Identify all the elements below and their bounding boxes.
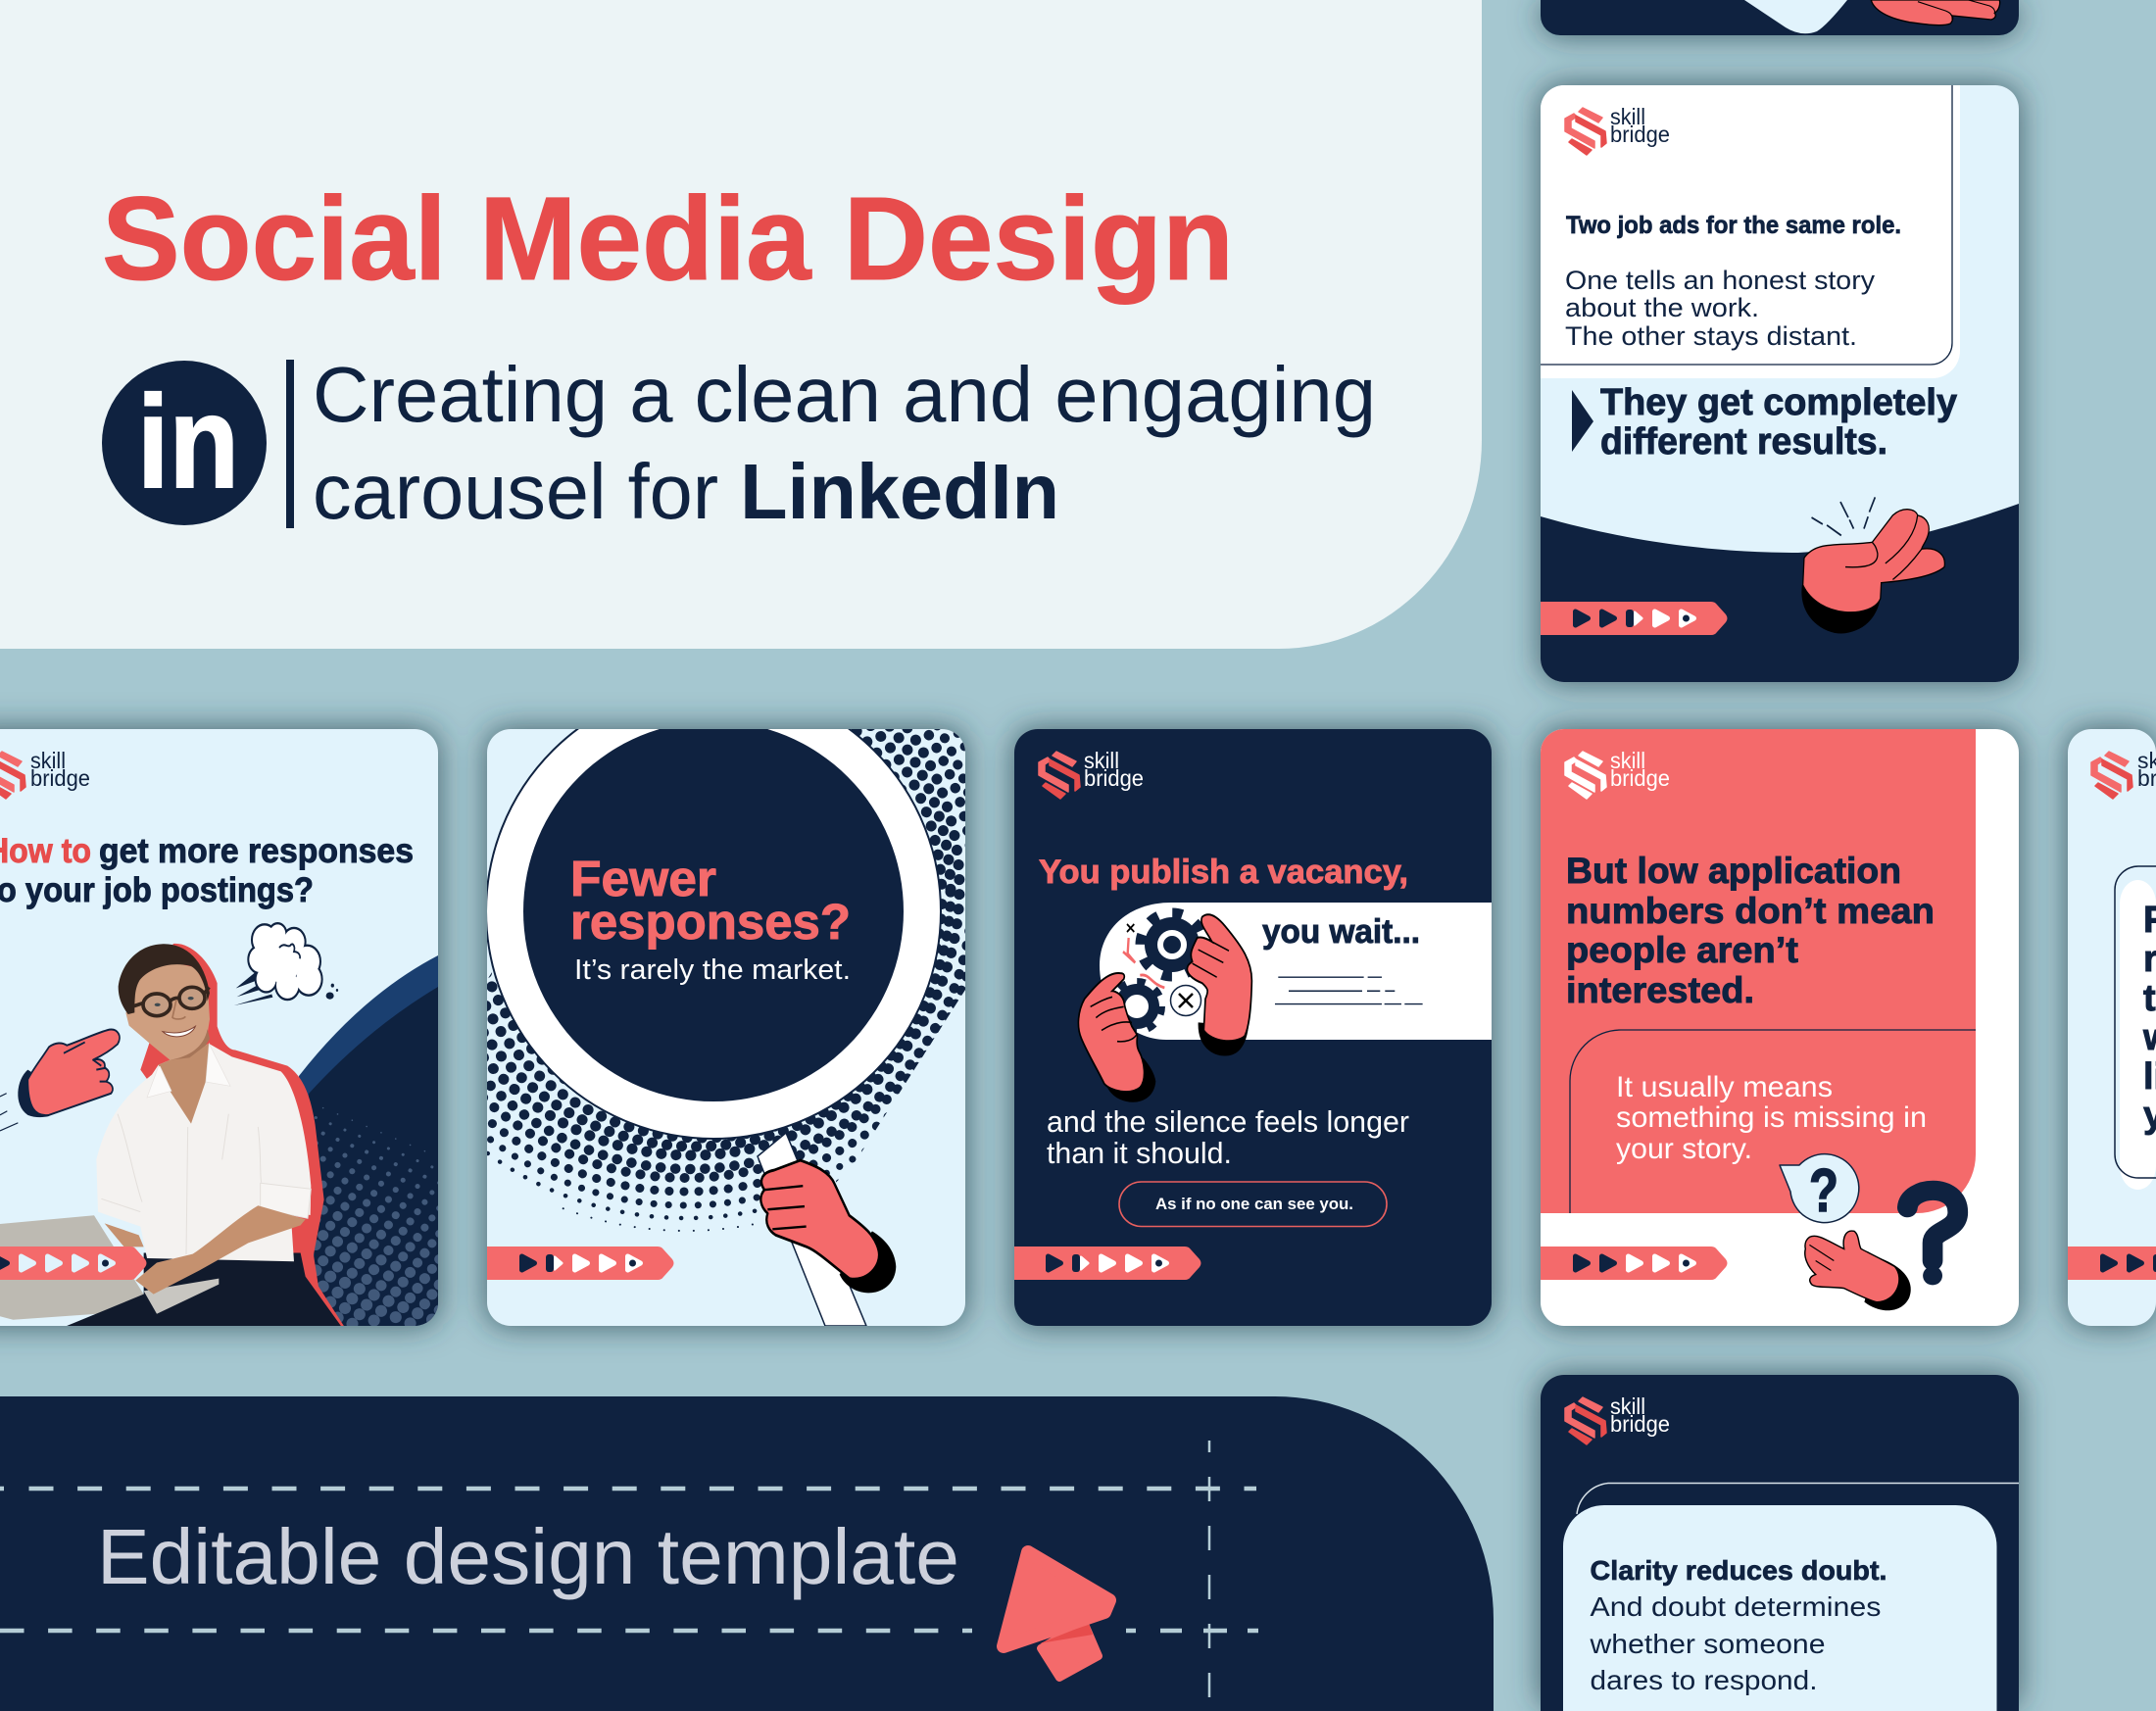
progress bar [2068,1247,2156,1280]
left arm skin [105,1223,144,1247]
icon: triangle marker [1572,390,1593,452]
logo: bridge [1610,1411,1670,1437]
logo: bridge [30,765,90,791]
heading: low application numbers: But low application [1566,851,1901,891]
icon: hand [1871,0,2000,25]
guide: top dashed line [0,1487,1256,1491]
magnifier handle [758,1133,866,1326]
card: top cropped slide [1541,0,2019,35]
icon: speech bubble with question mark [1780,1154,1859,1225]
icon: circled cross [1170,986,1201,1015]
icon: coral squiggles [1123,938,1164,988]
logo [0,748,90,799]
logo: skill [1084,748,1119,773]
card: fewer responses [337,533,1035,1326]
heading: different results: different results. [1600,421,1887,463]
icon: LinkedIn: in [137,369,239,515]
subheading: It’s rarely the market. [574,954,851,986]
progress bar [0,1247,147,1280]
text lines [1275,977,1423,1004]
coral panel [1541,729,1976,1213]
logo: skill [1610,1393,1645,1419]
icon: large gear [1142,914,1202,975]
guide: bottom dashed line [0,1629,972,1633]
logo [1565,748,1670,799]
subtitle [313,351,1376,535]
icon: hand on handle [760,1160,896,1293]
guide: vertical dashed line [1208,1441,1210,1711]
heading: editable design template: Editable design template [97,1513,959,1600]
logo: skill [1610,104,1645,129]
logo: bridge [1610,122,1670,147]
blue arc [299,955,438,1326]
progress bar [1541,602,1727,635]
logo: skill [30,748,66,773]
text: and the silence [1047,1104,1409,1170]
icon: large question mark [1907,1191,1958,1285]
heading: low application numbers [1566,851,1935,1010]
logo: bridge [1610,765,1670,791]
panel: title [0,0,1482,649]
illustration: gears and hands [1078,914,1251,1102]
icon: open hand [1805,1231,1911,1310]
photo: smiling man with laptop [0,944,346,1330]
progress bar [1482,1247,1727,1280]
heading: how to get more responses: get more responses [99,832,414,870]
text: clarity reduces doubt: dares to respond. [1590,1665,1817,1695]
heading: different results [1599,387,1958,455]
icon: small gear [1113,983,1160,1030]
logo: bridge [1084,765,1144,791]
forearm and hand [135,1205,306,1295]
frame line [1577,1484,2019,1514]
shirt [96,1044,311,1261]
laptop base [144,1279,219,1314]
glasses [134,987,209,1016]
icon: right hand [1187,914,1251,1056]
frame line [1570,1030,1976,1213]
icon: thought cloud [234,924,338,1005]
text: missing in your story: your story. [1616,1133,1752,1165]
text: clarity reduces doubt: whether someone [1589,1629,1825,1659]
divider [286,360,294,528]
card: how to get more responses [0,729,451,1330]
subtitle: Creating a clean and engaging [313,351,1376,438]
card: right cropped slide [2068,729,2156,1326]
text: you wait: you wait... [1262,913,1420,951]
logo [1565,1393,1670,1444]
white callout box [2115,866,2156,1190]
navy wave [1541,504,2019,682]
progress bar [428,1247,674,1280]
icon: cursor arrow [1004,1552,1109,1678]
subtitle: carousel for LinkedIn [313,448,1059,535]
guide: bottom dashed line right part [1126,1629,1258,1633]
red sticker outline [140,944,346,1330]
progress bar [956,1247,1201,1280]
hair [119,944,210,1014]
heading: low application numbers: interested. [1566,970,1754,1010]
text: clarity reduces doubt [1589,1555,1887,1695]
text: cropped letters [2142,900,2156,1136]
heading: different results: They get completely [1600,382,1957,423]
text block: job ads: The other stays distant. [1565,321,1857,351]
logo [1039,748,1144,799]
text: clarity reduces doubt: And doubt determines [1590,1591,1882,1622]
icon: LinkedIn [102,361,267,525]
heading: fewer responses: responses? [570,894,851,950]
icon: left hand [1078,973,1155,1102]
logo: skill [1610,748,1645,773]
title: Social Media Design [102,171,1234,305]
heading: how to get more responses [0,832,414,909]
card: low application numbers [1482,729,2019,1326]
panel: editable design template [0,1396,1494,1711]
neck and chest [159,1044,211,1124]
heading: low application numbers: numbers don’t mean [1566,891,1935,931]
text block: job ads: One tells an honest story [1565,266,1876,295]
card: you publish a vacancy [956,729,1492,1326]
text: cropped letters: t [2143,978,2156,1019]
card: two job ads [1541,85,2019,682]
magnifier lens [486,684,941,1139]
heading: you publish a vacancy: You publish a vacancy, [1039,854,1408,891]
text block: job ads [1565,212,1901,351]
icon: speech bubble with question mark: ? [1809,1157,1838,1225]
callout pill: As if no one can see you. [1155,1195,1353,1213]
white band [1100,903,1492,1040]
eyes [155,1003,161,1006]
nose and smile [172,1000,185,1019]
text: clarity reduces doubt: Clarity reduces doubt. [1590,1555,1887,1586]
laptop lid [0,1215,154,1320]
text block: job ads: about the work. [1565,293,1759,322]
icon: snapping hand [1801,497,1944,634]
trousers [66,1252,341,1327]
heading: fewer responses [570,851,851,950]
text: missing in your story: It usually means [1616,1071,1833,1103]
halftone ring [337,533,1035,1231]
callout pill [1119,1182,1387,1227]
icon: pointing hand [0,1030,120,1131]
logo [2091,748,2156,799]
icon: small cross [1127,924,1134,932]
text: missing in your story: something is missing in [1616,1101,1927,1134]
heading: low application numbers: people aren’t [1566,930,1798,970]
halftone dots [314,1107,438,1326]
text: missing in your story [1616,1071,1927,1165]
face [125,960,210,1060]
text: and the silence: and the silence feels longer [1047,1104,1409,1139]
text block: job ads: Two job ads for the same role. [1566,212,1901,239]
logo [1565,104,1670,155]
card: clarity reduces doubt [1541,1375,2019,1711]
light text box [1563,1505,1997,1711]
heading: fewer responses: Fewer [570,851,716,906]
text: and the silence: than it should. [1047,1136,1232,1170]
